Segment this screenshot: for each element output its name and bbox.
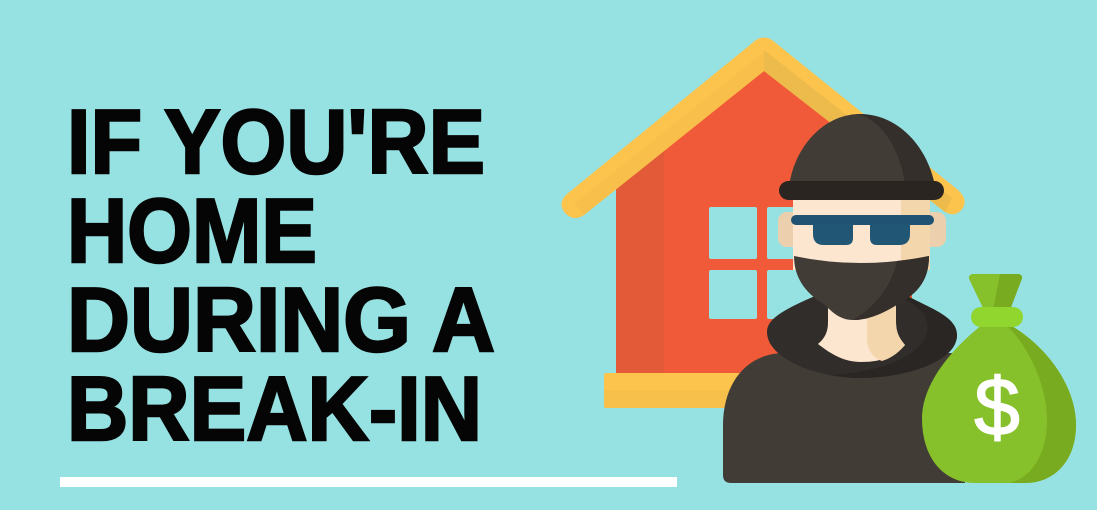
title: HOME <box>67 181 317 282</box>
title: IF YOU'RE <box>67 92 485 193</box>
icon: house <box>561 38 965 408</box>
title: DURING A <box>67 270 495 371</box>
bag tie <box>971 307 1023 327</box>
sunglasses <box>791 215 934 245</box>
white underline bar <box>60 477 677 487</box>
house wall <box>616 69 912 373</box>
icon: money bag <box>922 274 1076 483</box>
hat <box>779 114 944 200</box>
icon: burglar <box>723 114 965 483</box>
title <box>67 92 495 460</box>
window <box>709 207 815 319</box>
mask <box>794 256 929 320</box>
bag body <box>922 325 1076 483</box>
wall shadow strip <box>616 148 664 373</box>
hood collar <box>767 296 957 378</box>
face <box>793 195 930 270</box>
roof <box>561 38 965 218</box>
neck <box>818 300 905 362</box>
ears <box>778 212 946 247</box>
body <box>723 353 965 483</box>
dollar sign: $ <box>974 362 1020 453</box>
title: BREAK-IN <box>67 359 482 460</box>
bag top flap <box>969 274 1022 310</box>
foundation <box>604 373 774 408</box>
bag shadow <box>1006 325 1076 483</box>
